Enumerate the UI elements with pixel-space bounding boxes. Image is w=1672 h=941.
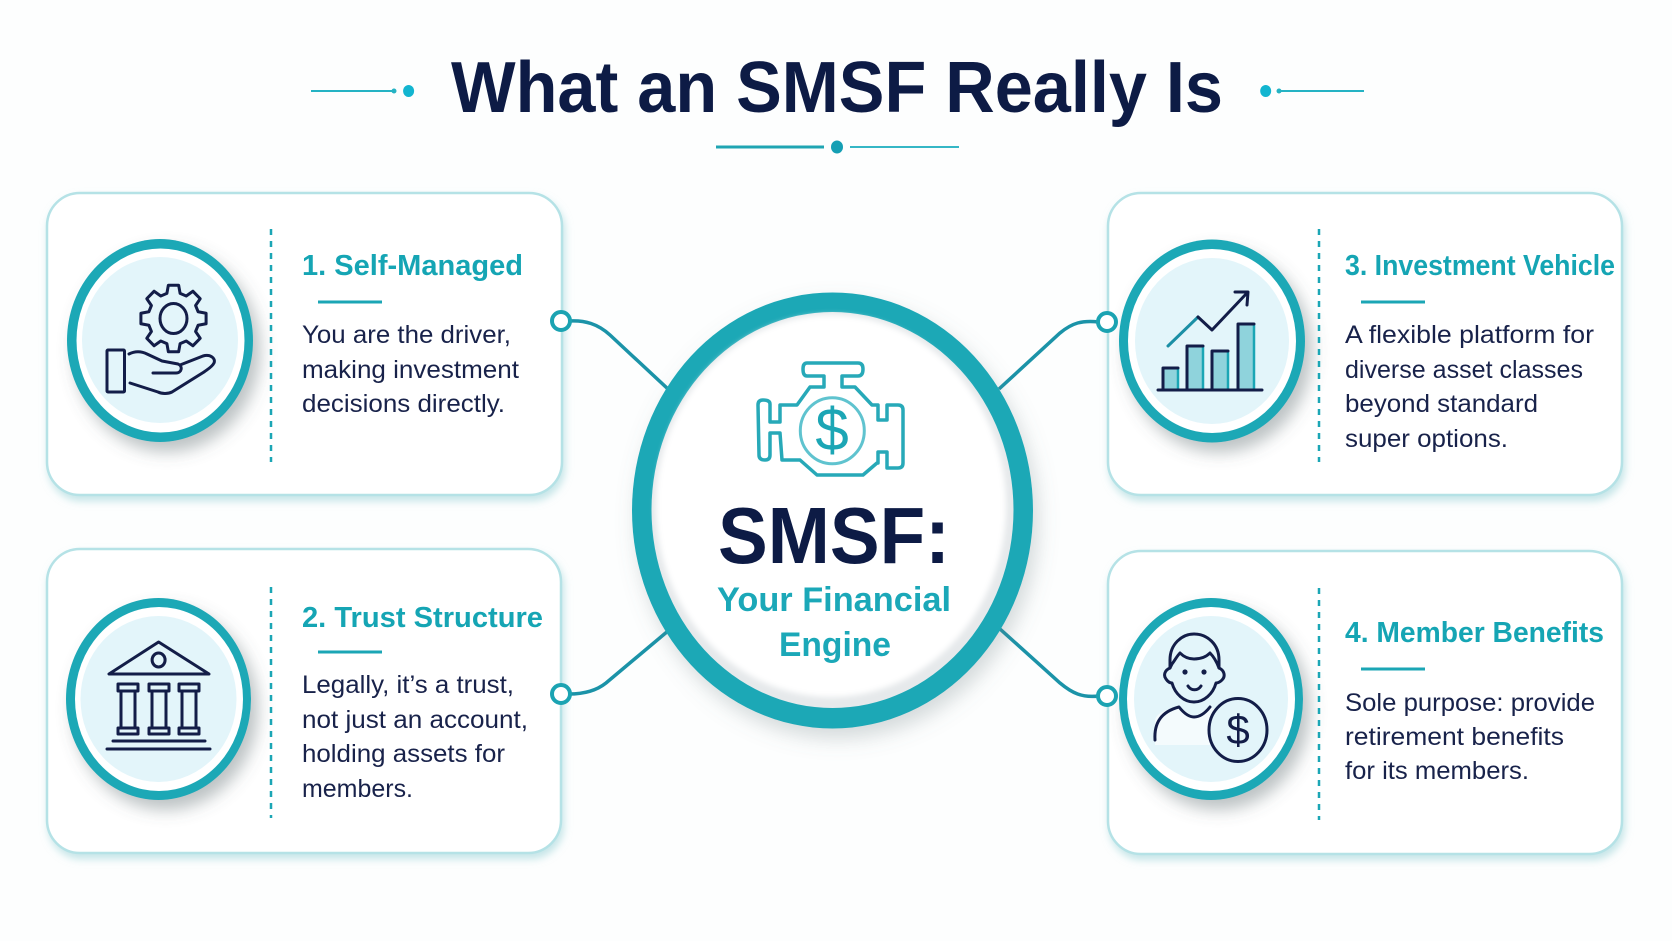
icon: bank building — [66, 598, 251, 800]
connector: card 4 to hub — [1000, 629, 1116, 705]
icon: hand holding gear — [67, 239, 253, 442]
divider — [1318, 588, 1320, 820]
icon: engine with dollar: $ — [815, 396, 849, 463]
heading: 3. Investment Vehicle — [1345, 250, 1615, 282]
body text: holding assets for — [302, 740, 505, 768]
body text: decisions directly. — [302, 390, 505, 418]
title ornament: left — [311, 85, 414, 97]
body text — [1345, 689, 1595, 785]
hub subtitle: Engine — [779, 626, 891, 664]
body text: for its members. — [1345, 757, 1529, 785]
body text: super options. — [1345, 425, 1508, 453]
title: What an SMSF Really Is — [451, 48, 1223, 128]
divider — [1318, 229, 1320, 462]
icon: member with dollar coin — [1119, 598, 1303, 800]
body text: diverse asset classes — [1345, 356, 1583, 384]
heading rule — [1361, 300, 1425, 304]
connector: card 2 to hub — [552, 631, 668, 703]
body text — [302, 671, 528, 803]
heading rule — [1361, 668, 1425, 670]
heading: 1. Self-Managed — [302, 250, 523, 282]
connector: card 1 to hub — [552, 312, 668, 389]
hub subtitle: Your Financial — [717, 581, 951, 619]
body text — [302, 321, 519, 418]
title ornament: right — [1260, 85, 1364, 97]
body text: Sole purpose: provide — [1345, 689, 1595, 717]
heading: 2. Trust Structure — [302, 602, 543, 634]
body text: members. — [302, 775, 413, 803]
hub title: SMSF: — [718, 491, 950, 580]
body text: A flexible platform for — [1345, 321, 1594, 349]
body text: Legally, it’s a trust, — [302, 671, 514, 699]
central hub — [632, 292, 1033, 728]
panel: 1. Self-Managed — [47, 193, 562, 495]
title underline ornament — [716, 140, 959, 154]
body text: making investment — [302, 356, 519, 384]
heading rule — [318, 650, 382, 654]
body text: beyond standard — [1345, 390, 1538, 418]
body text: not just an account, — [302, 706, 528, 734]
body text: retirement benefits — [1345, 723, 1564, 751]
panel: 2. Trust Structure — [47, 549, 561, 853]
heading rule — [318, 300, 382, 304]
panel: 4. Member Benefits — [1108, 551, 1622, 854]
icon: engine with dollar — [758, 363, 903, 475]
divider — [270, 229, 272, 462]
icon: rising bar chart — [1119, 240, 1305, 442]
connector: card 3 to hub — [999, 313, 1116, 389]
heading: 4. Member Benefits — [1345, 617, 1604, 649]
hub subtitle — [717, 581, 951, 664]
panel: 3. Investment Vehicle — [1108, 193, 1622, 495]
icon: member with dollar coin: $ — [1226, 706, 1250, 753]
divider — [270, 587, 272, 818]
body text: You are the driver, — [302, 321, 511, 349]
body text — [1345, 321, 1594, 453]
